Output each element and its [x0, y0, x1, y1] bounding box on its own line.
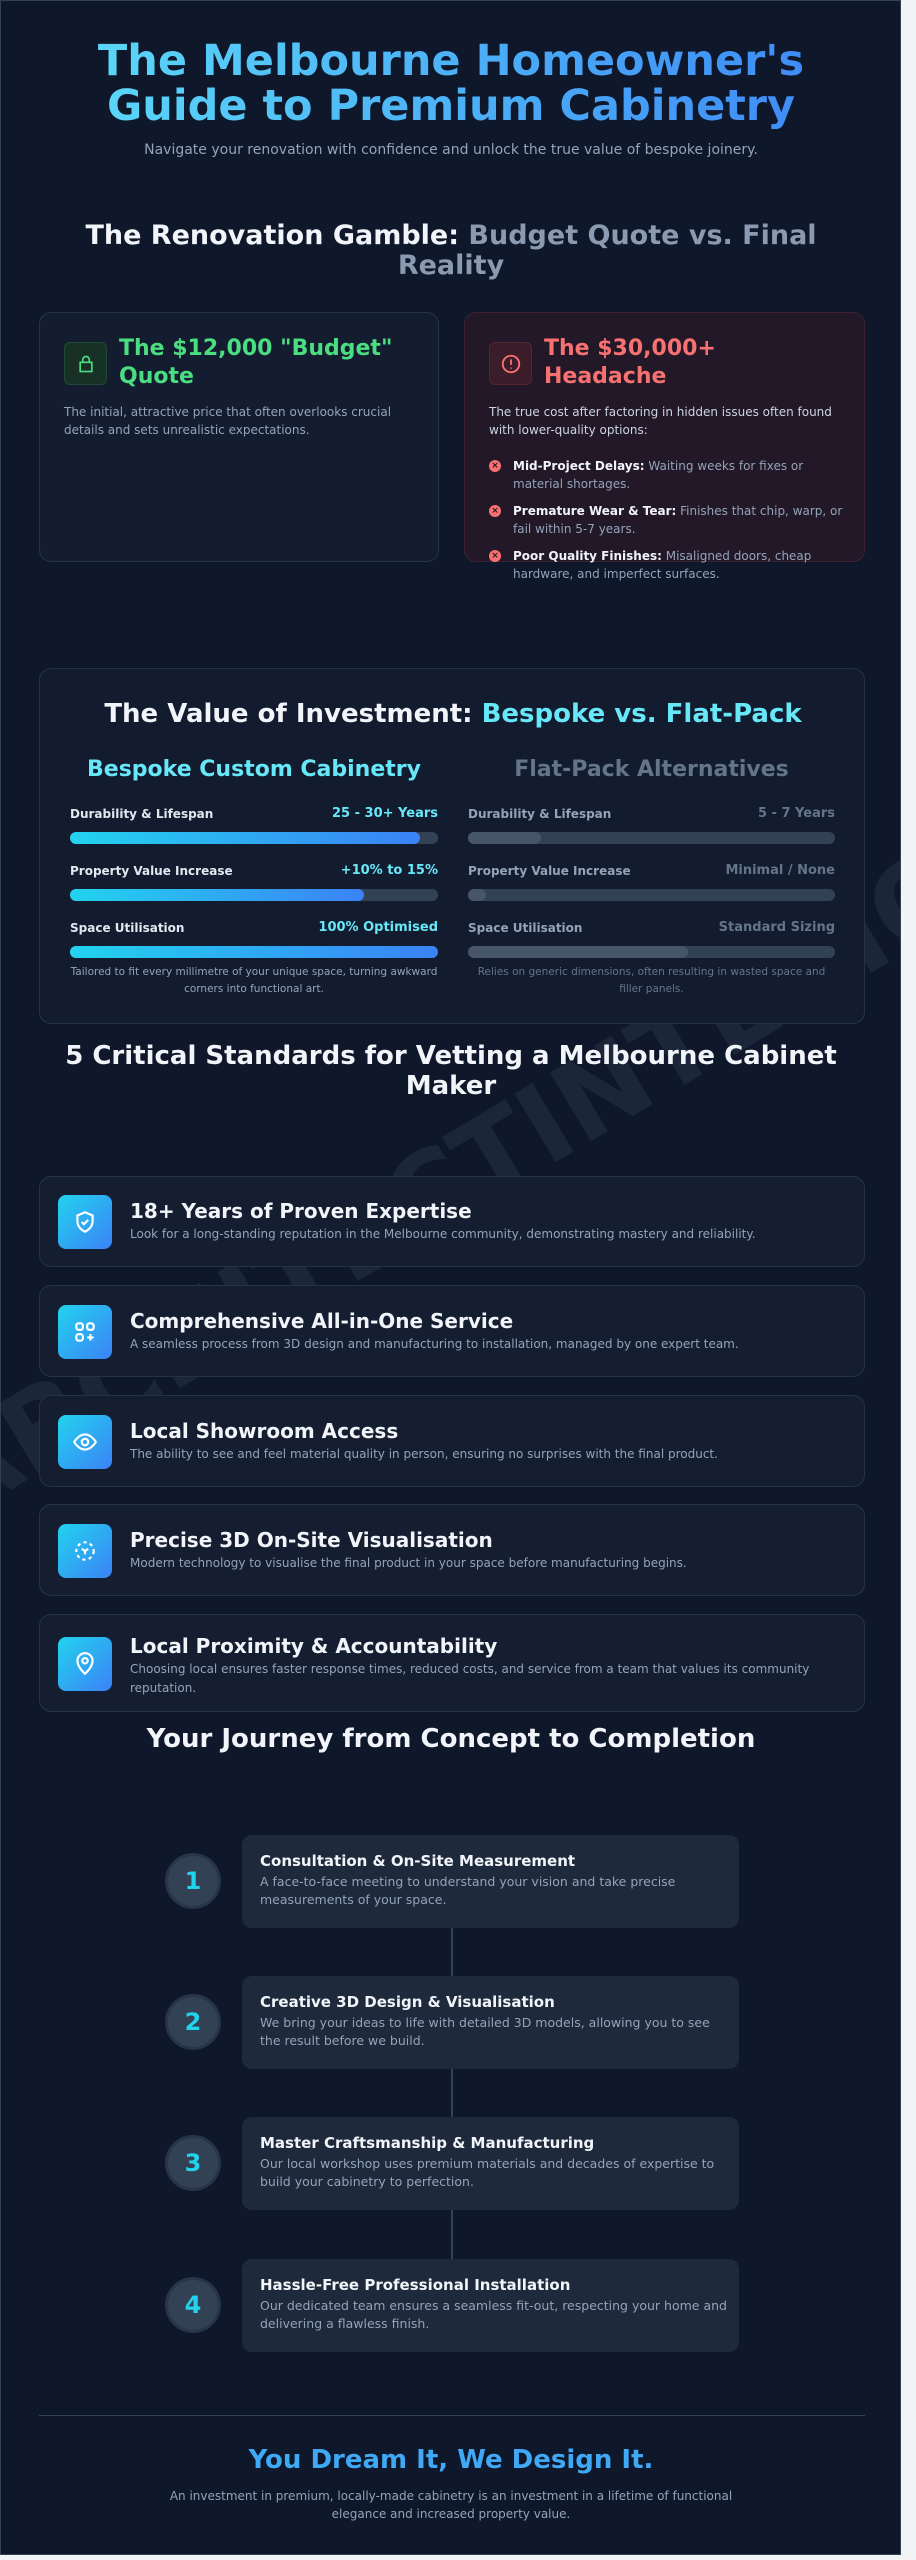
icon: bag	[64, 342, 107, 385]
standard 4: Precise 3D On-Site Visualisation	[130, 1528, 493, 1552]
icon: alert	[489, 342, 532, 385]
standard 3: Local Showroom Access	[130, 1419, 398, 1443]
heading: The $12,000 "Budget" Quote	[119, 336, 392, 389]
step 1: 1	[185, 1867, 201, 1895]
bullet list: Mid-Project Delays: Waiting weeks for fixes or material shortages.	[513, 459, 803, 491]
text: The initial, attractive price that often overlooks crucial details and sets unrealistic expectations.	[64, 405, 391, 437]
footer text: An investment in premium, locally-made cabinetry is an investment in a lifetime of functional elegance and increased property value.	[170, 2489, 732, 2521]
column: bespoke: 25 - 30+ Years	[332, 806, 438, 821]
step 3: Master Craftsmanship & Manufacturing	[260, 2134, 594, 2152]
icon: 3d	[58, 1524, 112, 1578]
column: bespoke: 100% Optimised	[318, 920, 438, 935]
column: bespoke: +10% to 15%	[341, 863, 438, 878]
step 2: We bring your ideas to life with detailed 3D models, allowing you to see the result before we build.	[260, 2015, 710, 2048]
standard 5	[39, 1614, 865, 1712]
title: Guide to Premium Cabinetry	[107, 81, 795, 131]
bullet list: ×	[491, 551, 499, 561]
step 2	[165, 1976, 739, 2069]
heading: journey: Your Journey from Concept to Completion	[147, 1724, 755, 1754]
standard 5: Local Proximity & Accountability	[130, 1634, 497, 1658]
step 4: Our dedicated team ensures a seamless fit-out, respecting your home and delivering a flawless finish.	[260, 2298, 727, 2331]
column: flat-pack: Flat-Pack Alternatives	[514, 757, 789, 782]
heading: renovation gamble: The Renovation Gamble: Budget Quote vs. Final Reality	[85, 220, 817, 281]
column: flat-pack: Relies on generic dimensions, often resulting in wasted space and filler panels.	[478, 966, 825, 995]
step 3: 3	[185, 2149, 201, 2177]
standard 2	[39, 1285, 865, 1377]
column: bespoke	[70, 757, 438, 995]
bullet list: ×	[491, 506, 499, 516]
standard 3	[39, 1395, 865, 1487]
step 3	[165, 2117, 739, 2210]
icon: shield	[58, 1195, 112, 1249]
bullet list: Premature Wear & Tear: Finishes that chip, warp, or fail within 5-7 years.	[513, 504, 842, 536]
bullet list: ×	[491, 461, 499, 471]
standard 1: Look for a long-standing reputation in the Melbourne community, demonstrating mastery and reliability.	[130, 1227, 756, 1241]
step 1	[165, 1835, 739, 1928]
heading: The Value of Investment: Bespoke vs. Flat-Pack	[104, 699, 802, 729]
standard 3: The ability to see and feel material quality in person, ensuring no surprises with the final product.	[130, 1447, 718, 1461]
step 1: Consultation & On-Site Measurement	[260, 1852, 575, 1870]
icon: grid	[58, 1305, 112, 1359]
column: flat-pack: 5 - 7 Years	[758, 806, 835, 821]
text: The true cost after factoring in hidden issues often found with lower-quality options:	[489, 405, 832, 437]
heading: The $30,000+ Headache	[544, 336, 716, 389]
column: flat-pack	[468, 757, 835, 995]
standard 1: 18+ Years of Proven Expertise	[130, 1199, 472, 1223]
column: bespoke: Property Value Increase	[70, 864, 233, 878]
step 2: Creative 3D Design & Visualisation	[260, 1993, 555, 2011]
title: The Melbourne Homeowner's	[98, 36, 804, 86]
step 4: Hassle-Free Professional Installation	[260, 2276, 570, 2294]
column: bespoke: Durability & Lifespan	[70, 807, 213, 821]
panel: budget quote	[39, 312, 439, 562]
step 4	[165, 2259, 739, 2352]
column: flat-pack: Standard Sizing	[719, 920, 835, 935]
standard 4: Modern technology to visualise the final product in your space before manufacturing begins.	[130, 1556, 687, 1570]
heading: 5 critical standards: 5 Critical Standards for Vetting a Melbourne Cabinet Maker	[65, 1041, 837, 1101]
column: bespoke: Space Utilisation	[70, 921, 184, 935]
timeline line	[451, 1927, 453, 2261]
icon: eye	[58, 1415, 112, 1469]
subtitle: Navigate your renovation with confidence and unlock the true value of bespoke joinery.	[144, 142, 758, 158]
title	[1, 39, 901, 129]
column: flat-pack: Space Utilisation	[468, 921, 582, 935]
icon: pin	[58, 1637, 112, 1691]
standard 2: Comprehensive All-in-One Service	[130, 1309, 513, 1333]
panel: headache	[464, 312, 865, 562]
bullet list: Poor Quality Finishes: Misaligned doors, cheap hardware, and imperfect surfaces.	[513, 549, 811, 581]
column: flat-pack: Durability & Lifespan	[468, 807, 611, 821]
column: bespoke: Bespoke Custom Cabinetry	[87, 757, 421, 782]
standard 2: A seamless process from 3D design and manufacturing to installation, managed by one expert team.	[130, 1337, 739, 1351]
panel: value of investment	[39, 668, 865, 1024]
column: bespoke: Tailored to fit every millimetre of your unique space, turning awkward corners into functional art.	[71, 966, 437, 995]
standard 5: Choosing local ensures faster response times, reduced costs, and service from a team that values its community reputation.	[130, 1662, 809, 1695]
standard 1	[39, 1176, 865, 1267]
step 2: 2	[185, 2008, 201, 2036]
step 4: 4	[185, 2291, 201, 2319]
column: flat-pack: Minimal / None	[725, 863, 835, 878]
standard 4	[39, 1504, 865, 1596]
footer heading: You Dream It, We Design It.	[249, 2445, 653, 2475]
column: flat-pack: Property Value Increase	[468, 864, 631, 878]
step 1: A face-to-face meeting to understand your vision and take precise measurements of your space.	[260, 1874, 675, 1907]
step 3: Our local workshop uses premium materials and decades of expertise to build your cabinetry to perfection.	[260, 2156, 714, 2189]
bullet list	[489, 459, 842, 581]
